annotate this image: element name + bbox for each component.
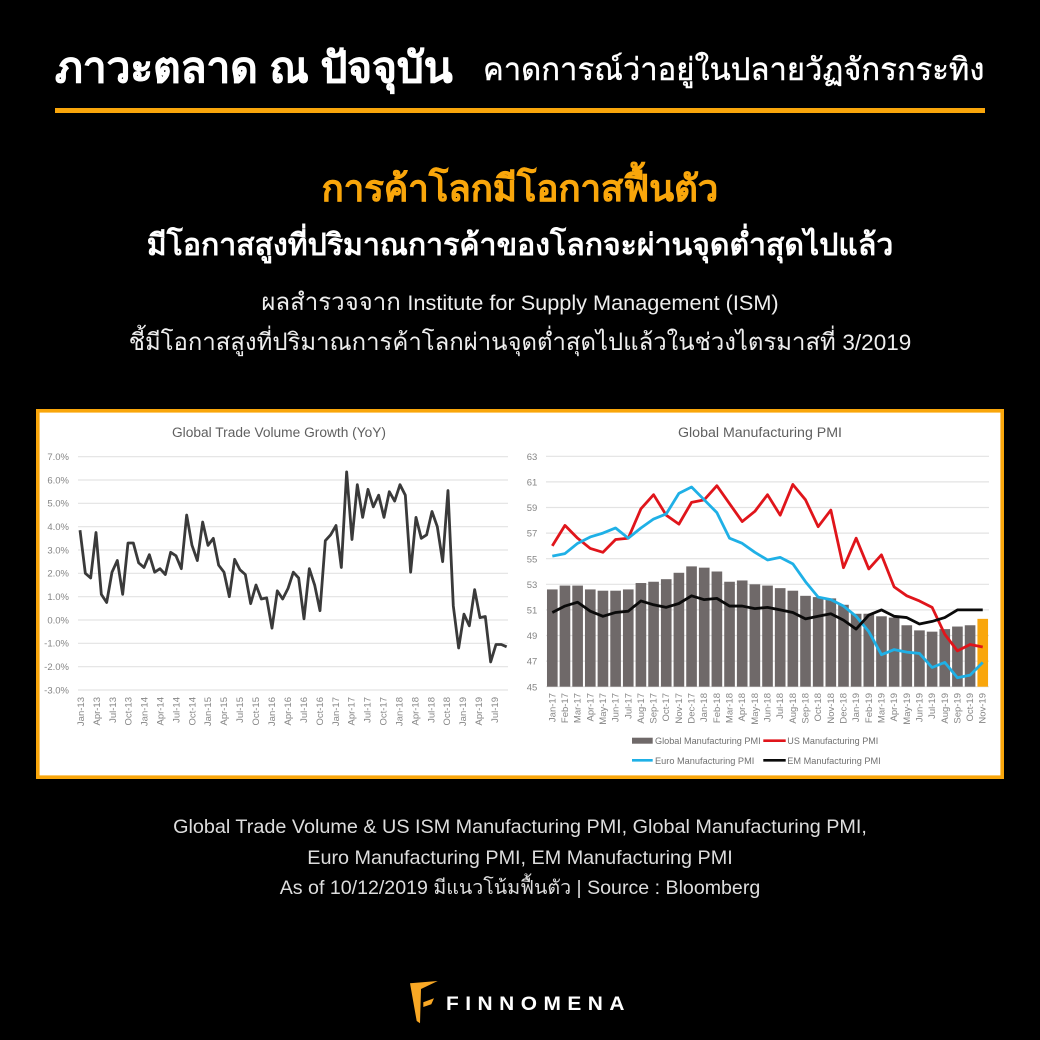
x axis labels: Apr-16: [283, 697, 294, 726]
x axis labels: Jan-19: [851, 693, 862, 722]
y axis labels: 55: [527, 554, 537, 565]
y axis labels: 51: [527, 606, 537, 616]
x axis labels: Oct-14: [188, 697, 198, 726]
x axis labels: Jan-13: [76, 697, 87, 726]
y axis labels: -1.0%: [44, 639, 70, 650]
x axis labels: Apr-17: [346, 697, 358, 726]
x axis labels: Sep-17: [649, 693, 660, 724]
legend: Global Manufacturing PMI: [655, 736, 761, 747]
x axis labels: Jan-14: [140, 697, 150, 726]
x axis labels: May-17: [598, 693, 609, 725]
x axis labels: Jan-17: [331, 697, 342, 726]
chart title: Global Manufacturing PMI: [678, 425, 842, 440]
x axis labels: Feb-19: [864, 693, 875, 723]
x axis labels: Sep-19: [952, 693, 963, 724]
x axis labels: Apr-19: [474, 697, 485, 726]
x axis labels: Nov-17: [674, 693, 685, 724]
y axis labels: 63: [527, 452, 537, 463]
x axis labels: Jan-17: [547, 693, 558, 722]
y axis labels: -3.0%: [44, 685, 70, 696]
x axis labels: Jul-14: [172, 697, 182, 723]
x axis labels: Dec-17: [687, 693, 698, 724]
y axis labels: 53: [527, 580, 537, 591]
y axis labels: 49: [527, 631, 537, 642]
x axis labels: Jan-18: [394, 697, 406, 726]
x axis labels: Dec-18: [838, 693, 850, 724]
x axis labels: Aug-17: [636, 693, 647, 724]
x axis labels: May-19: [902, 693, 913, 725]
y axis labels: 47: [527, 657, 537, 668]
x axis labels: Apr-19: [889, 693, 900, 722]
x axis labels: Oct-18: [813, 693, 824, 722]
y axis labels: 4.0%: [47, 522, 70, 533]
y axis labels: 3.0%: [47, 545, 70, 556]
x axis labels: Apr-15: [219, 697, 230, 726]
x axis labels: Jul-19: [490, 697, 501, 723]
x axis labels: [547, 693, 989, 725]
chart: global manufacturing PMI: [527, 425, 989, 767]
x axis labels: Nov-18: [826, 693, 837, 724]
y axis labels: 6.0%: [47, 475, 70, 486]
x axis labels: Jul-16: [299, 697, 310, 723]
x axis labels: Jun-17: [611, 693, 622, 722]
y axis labels: [44, 452, 70, 696]
y axis labels: [527, 452, 537, 693]
x axis labels: Oct-17: [378, 697, 390, 726]
x axis labels: Oct-13: [124, 697, 134, 726]
legend: Euro Manufacturing PMI: [655, 756, 754, 767]
x axis labels: Aug-19: [940, 693, 951, 724]
chart title: Global Trade Volume Growth (YoY): [172, 425, 386, 440]
logo: FINNOMENA: [410, 981, 631, 1024]
y axis labels: 1.0%: [47, 592, 70, 603]
x axis labels: Jan-19: [458, 697, 469, 726]
x axis labels: Apr-18: [737, 693, 748, 722]
subheading: มีโอกาสสูงที่ปริมาณการค้าของโลกจะผ่านจุดต่ำสุดไปแล้ว: [147, 229, 893, 262]
legend: [632, 736, 881, 767]
x axis labels: Jun-18: [762, 693, 774, 722]
x axis labels: Apr-14: [156, 697, 166, 726]
x axis labels: Oct-16: [315, 697, 326, 726]
title: current market status: ภาวะตลาด ณ ปัจจุบัน: [55, 44, 453, 91]
x axis labels: Jun-19: [914, 693, 925, 722]
x axis labels: May-18: [750, 693, 761, 725]
y axis labels: 45: [527, 682, 537, 693]
line: EM manufacturing PMI: [552, 596, 983, 629]
chart: global trade volume growth: [44, 425, 508, 726]
x axis labels: Oct-17: [661, 693, 672, 722]
x axis labels: Nov-19: [978, 693, 989, 724]
x axis labels: Jul-18: [426, 697, 438, 723]
header rule: [55, 108, 985, 112]
line: trade volume growth: [80, 472, 507, 662]
wordmark: FINNOMENA: [446, 994, 631, 1015]
text block: ISM survey: ผลสำรวจจาก Institute for Supply Management (ISM): [261, 289, 779, 316]
x axis labels: Jul-17: [623, 693, 634, 719]
x axis labels: Oct-15: [251, 697, 262, 726]
x axis labels: Aug-18: [788, 693, 799, 724]
x axis labels: Feb-17: [560, 693, 571, 723]
x axis labels: Apr-17: [585, 693, 596, 722]
x axis labels: Jul-18: [775, 693, 786, 719]
y axis labels: 2.0%: [47, 569, 70, 580]
subtitle: late bull cycle: คาดการณ์ว่าอยู่ในปลายวัฏจักรกระทิง: [483, 52, 984, 87]
x axis labels: Feb-18: [712, 693, 723, 723]
x axis labels: Jul-13: [108, 697, 119, 723]
text block: ISM survey: [129, 289, 911, 356]
x axis labels: Mar-18: [724, 693, 736, 723]
x axis labels: Apr-13: [92, 697, 103, 726]
y axis labels: 59: [527, 503, 537, 514]
y axis labels: 57: [527, 529, 537, 540]
x axis labels: Oct-18: [442, 697, 453, 726]
line: Euro manufacturing PMI: [552, 487, 983, 678]
x axis labels: Oct-19: [965, 693, 976, 722]
text block: source notes: As of 10/12/2019 มีแนวโน้มฟื้นตัว | Source : Bloomberg: [280, 877, 760, 899]
x axis labels: Jan-16: [267, 697, 278, 726]
x axis labels: Jul-17: [362, 697, 374, 723]
y axis labels: 61: [527, 478, 537, 488]
x axis labels: Jan-18: [699, 693, 710, 722]
text block: ISM survey: ชี้มีโอกาสสูงที่ปริมาณการค้าโลกผ่านจุดต่ำสุดไปแล้วในช่วงไตรมาสที่ 3/2019: [129, 329, 911, 356]
bars: global manufacturing PMI: [547, 566, 988, 687]
y axis labels: 7.0%: [47, 452, 70, 463]
x axis labels: [76, 697, 501, 726]
x axis labels: Mar-19: [876, 693, 888, 723]
icon: F mark: [410, 981, 438, 1024]
y axis labels: -2.0%: [44, 662, 70, 673]
text block: source notes: Global Trade Volume & US ISM Manufacturing PMI, Global Manufacturing PMI,: [173, 816, 867, 838]
x axis labels: Mar-17: [573, 693, 584, 723]
heading: world trade recovery: การค้าโลกมีโอกาสฟื้นตัว: [322, 168, 718, 209]
legend: US Manufacturing PMI: [787, 736, 878, 747]
y axis labels: 5.0%: [47, 499, 70, 510]
y axis labels: 0.0%: [47, 615, 70, 626]
x axis labels: Jan-15: [203, 697, 214, 726]
x axis labels: Jul-15: [235, 697, 246, 723]
legend: EM Manufacturing PMI: [787, 756, 881, 767]
line: US manufacturing PMI: [552, 484, 983, 651]
x axis labels: Jul-19: [927, 693, 938, 719]
x axis labels: Apr-18: [410, 697, 422, 726]
text block: source notes: Euro Manufacturing PMI, EM Manufacturing PMI: [307, 847, 733, 869]
text block: source notes: [173, 816, 867, 899]
x axis labels: Sep-18: [800, 693, 812, 724]
